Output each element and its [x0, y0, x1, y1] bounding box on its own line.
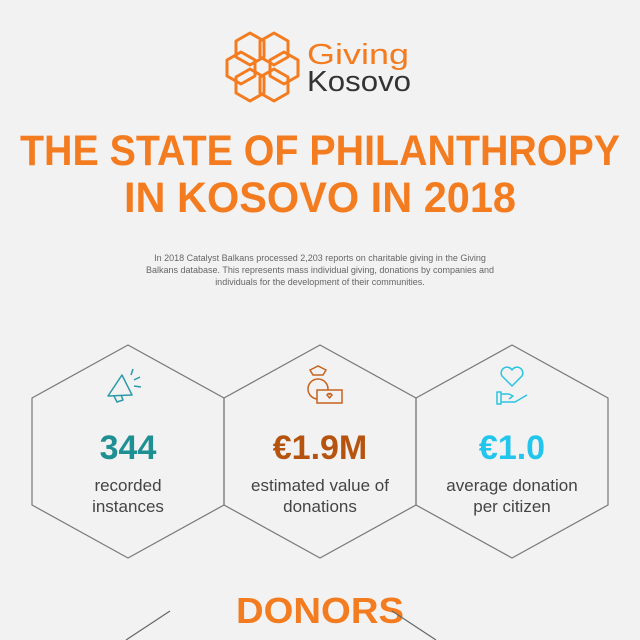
panel: recorded instances: recorded — [94, 476, 162, 495]
icon: logo hexagons — [227, 33, 298, 101]
panel: recorded instances — [32, 345, 224, 558]
heading: donors: DONORS — [236, 590, 404, 631]
panel: average donation: per citizen — [473, 497, 551, 516]
title: IN KOSOVO IN 2018 — [124, 174, 516, 222]
panel: estimated value: estimated value of — [251, 476, 389, 495]
lower hexagon edges — [126, 611, 436, 640]
panel: estimated value: €1.9M — [273, 429, 367, 467]
intro paragraph — [146, 253, 494, 287]
icon: megaphone — [108, 369, 141, 402]
panel: estimated value: donations — [283, 497, 357, 516]
panel: estimated value — [224, 345, 416, 558]
intro paragraph: In 2018 Catalyst Balkans processed 2,203 reports on charitable giving in the Giving — [154, 253, 486, 263]
intro paragraph: Balkans database. This represents mass individual giving, donations by companies and — [146, 265, 494, 275]
logo — [227, 33, 411, 101]
panel: recorded instances: 344 — [100, 429, 156, 467]
panel: average donation — [416, 345, 608, 558]
icon: ring and money — [308, 366, 342, 403]
title — [20, 127, 620, 222]
icon: heart in hand — [497, 367, 527, 404]
logo: Kosovo — [307, 66, 411, 98]
panel: average donation: €1.0 — [479, 429, 545, 467]
panel: average donation: average donation — [446, 476, 578, 495]
logo text: Giving — [307, 39, 409, 71]
intro paragraph: individuals for the development of their communities. — [215, 277, 425, 287]
panel: recorded instances: instances — [92, 497, 164, 516]
